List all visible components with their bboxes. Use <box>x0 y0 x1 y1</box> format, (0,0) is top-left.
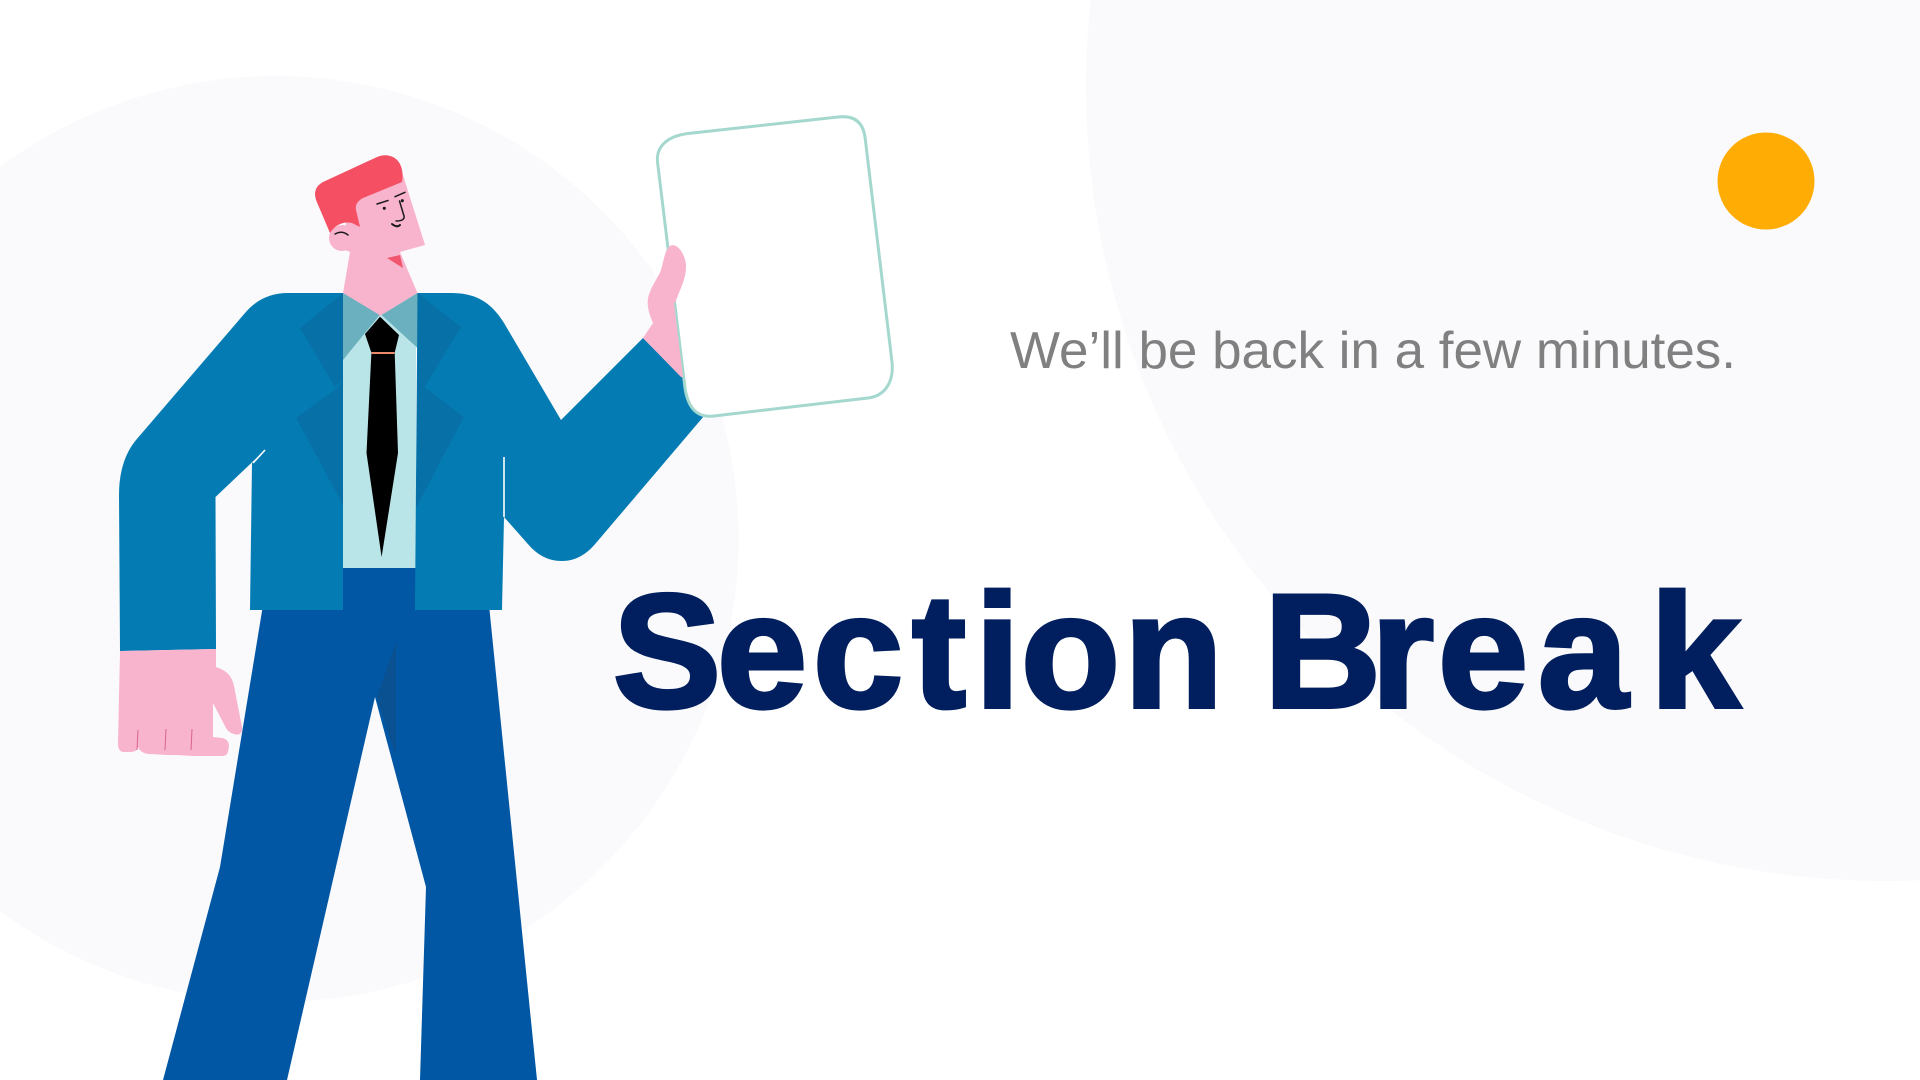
shirt collar <box>343 293 418 360</box>
blank sheet <box>657 117 892 416</box>
subtitle: We’ll be back in a few minutes. <box>1010 322 1736 380</box>
necktie <box>365 317 399 557</box>
face features <box>335 192 405 235</box>
shirt <box>343 293 416 568</box>
ear <box>329 225 355 251</box>
sheet edge over hand <box>675 303 684 377</box>
background circle: left <box>0 76 738 1002</box>
jacket lapels <box>296 293 464 508</box>
decorative orange dot <box>1718 132 1814 230</box>
trousers <box>163 605 537 1080</box>
jacket seam highlights <box>253 450 504 517</box>
lowered hand <box>118 649 242 756</box>
chin shadow <box>387 255 403 268</box>
trouser waist <box>343 568 416 612</box>
background circle: top right <box>1086 0 1920 881</box>
illustration: man holding a blank sheet <box>118 117 892 1080</box>
jacket left half and arm <box>119 293 343 651</box>
neck and face <box>343 172 425 316</box>
title: Section Break <box>613 561 1741 742</box>
raised hand <box>643 245 686 377</box>
hair <box>315 155 403 233</box>
jacket right half and raised arm <box>415 293 704 610</box>
